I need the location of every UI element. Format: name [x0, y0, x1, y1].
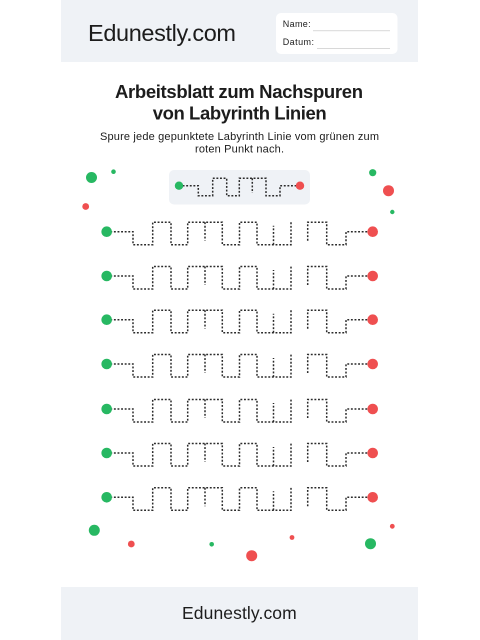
instructions: Spure jede gepunktete Labyrinth Linie vom grünen zum — [100, 131, 379, 143]
name and date box: Datum: — [283, 37, 314, 47]
maze line 2 — [101, 266, 378, 289]
logo text: Edunestly.com — [88, 20, 236, 46]
maze line 4 — [101, 354, 378, 377]
maze line 5 — [101, 400, 378, 422]
name and date box — [276, 13, 398, 54]
instructions: roten Punkt nach. — [195, 144, 284, 156]
footer band — [61, 587, 418, 640]
example maze line — [169, 170, 310, 204]
maze line 3 — [101, 310, 378, 333]
title: Arbeitsblatt zum Nachspuren — [115, 81, 363, 102]
maze line 1 — [101, 222, 378, 245]
maze line 6 — [101, 444, 378, 466]
name and date box: Name: — [283, 19, 311, 29]
maze line 7 — [101, 488, 378, 510]
title: von Labyrinth Linien — [153, 102, 327, 123]
decorative dots top — [82, 169, 394, 214]
header band — [61, 0, 418, 62]
footer text: Edunestly.com — [182, 603, 297, 623]
decorative dots bottom — [89, 524, 395, 561]
title — [115, 81, 363, 123]
instructions — [100, 131, 379, 156]
